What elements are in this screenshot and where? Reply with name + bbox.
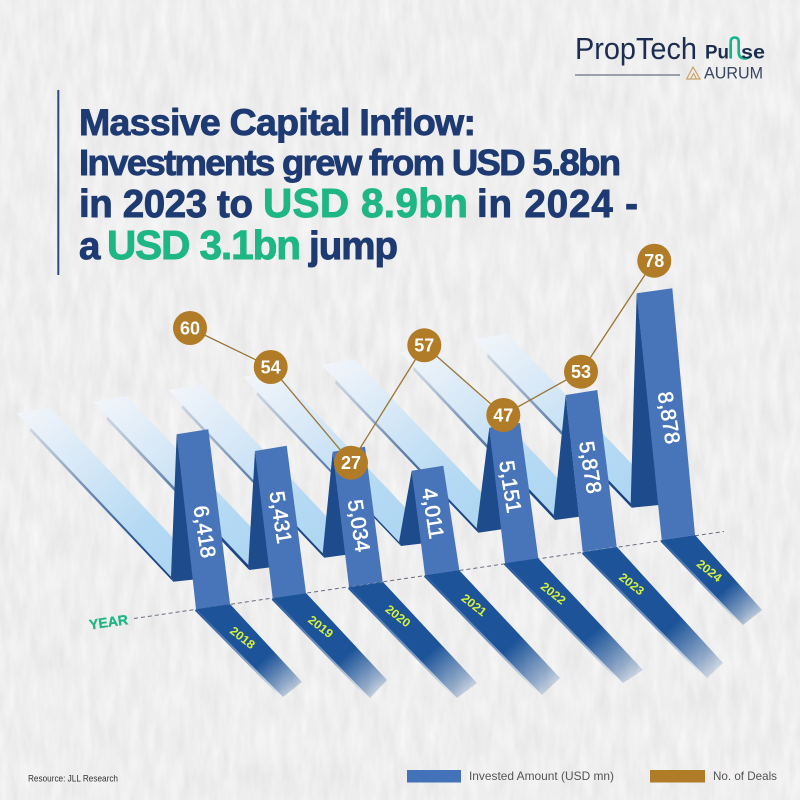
bar: 2018	[171, 429, 230, 609]
logo: PropTech Pulse Aurum: PropTech	[575, 32, 697, 66]
title	[79, 101, 638, 268]
marker: 78 deals	[637, 244, 671, 278]
legend: number of deals: No. of Deals	[713, 769, 777, 783]
bar: 2022: 5,151	[494, 459, 525, 515]
year labels: 2022	[538, 579, 569, 608]
marker: 57 deals: 57	[414, 336, 434, 356]
year labels	[227, 557, 725, 652]
logo: PropTech Pulse Aurum: Pu	[705, 42, 729, 64]
bar chart: invested amount	[171, 288, 695, 609]
marker: 47 deals	[486, 398, 520, 432]
marker: 53 deals	[564, 355, 598, 389]
title: Investments grew from USD 5.8bn	[79, 142, 621, 183]
bar: 2024	[631, 288, 695, 540]
marker: 54 deals	[254, 350, 288, 384]
year labels: 2021	[459, 591, 490, 619]
axis label: year: YEAR	[88, 611, 129, 633]
marker: 27 deals: 27	[341, 453, 361, 473]
legend: invested amount: Invested Amount (USD mn)	[469, 769, 614, 783]
logo: PropTech Pulse Aurum: se	[741, 42, 765, 64]
title: USD 3.1bn	[107, 222, 301, 268]
year labels: 2023	[616, 570, 647, 598]
bar: 2021: 4,011	[417, 486, 448, 540]
bar: 2023: 5,878	[574, 440, 605, 495]
bar: 2018: 6,418	[189, 504, 219, 560]
title: USD 8.9bn	[263, 180, 468, 226]
year labels: 2018	[227, 624, 258, 652]
logo: PropTech Pulse Aurum	[575, 32, 765, 83]
floor ribbons	[195, 535, 762, 700]
bar: 2020: 5,034	[343, 498, 374, 554]
marker: 54 deals: 54	[261, 357, 281, 377]
logo: PropTech Pulse Aurum: AURUM	[704, 65, 763, 83]
logo: PropTech Pulse Aurum: l	[728, 42, 733, 64]
back ribbons	[17, 334, 664, 582]
title: a	[79, 225, 101, 268]
marker: 60 deals	[173, 311, 207, 345]
year labels: 2020	[383, 602, 414, 630]
bar: 2021	[399, 466, 459, 575]
bar: 2019	[248, 446, 306, 598]
line chart: number of deals	[173, 244, 671, 480]
marker: 47 deals: 47	[493, 405, 513, 425]
legend: number of deals	[650, 769, 777, 783]
title accent rule	[57, 90, 59, 275]
title: jump	[308, 225, 398, 268]
bar: 2022	[477, 423, 538, 563]
marker: 57 deals	[407, 328, 441, 362]
bar: 2024: 8,878	[653, 390, 684, 446]
title: in 2023 to	[79, 183, 253, 226]
title: in 2024 -	[477, 183, 638, 226]
bar: 2023	[554, 390, 617, 552]
year labels: 2024	[694, 557, 725, 585]
marker: 53 deals: 53	[571, 362, 591, 382]
marker: 60 deals: 60	[180, 318, 200, 338]
bar: 2020	[323, 447, 383, 587]
source note: Resource: JLL Research	[28, 774, 118, 784]
year labels: 2019	[305, 613, 336, 641]
marker: 78 deals: 78	[644, 251, 664, 271]
bar: 2019: 5,431	[265, 490, 295, 545]
year axis dashed line	[134, 532, 724, 618]
title: Massive Capital Inflow:	[79, 101, 476, 143]
marker: 27 deals	[334, 446, 368, 480]
legend: invested amount	[407, 769, 614, 783]
